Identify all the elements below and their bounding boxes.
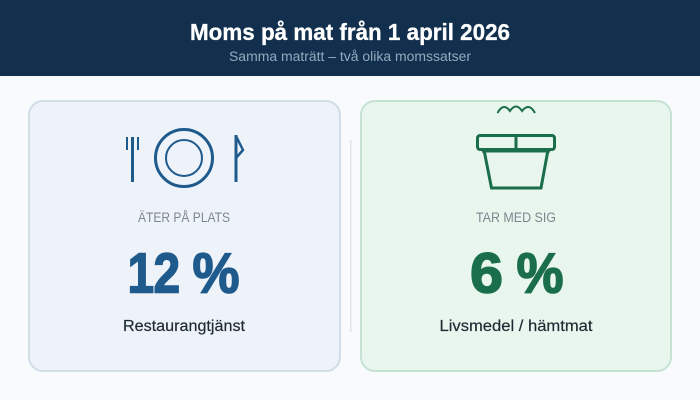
- panel: tar med sig: [361, 101, 671, 371]
- icon: knife: [234, 135, 238, 182]
- rate: 6 %: 6: [470, 242, 503, 306]
- icon: lid: [478, 136, 554, 150]
- header: [0, 0, 700, 76]
- rate: 6 %: %: [516, 242, 564, 306]
- icon: steam: [498, 106, 535, 113]
- label: ÄTER PÅ PLATS: [138, 210, 230, 225]
- icon: fork, plate and knife: [127, 130, 243, 186]
- subtitle: Samma maträtt – två olika momssatser: [229, 49, 472, 64]
- panel: äter på plats: [29, 101, 340, 371]
- icon: fork: [127, 137, 138, 150]
- icon: takeaway box: [478, 106, 554, 188]
- rate: 12 %: [128, 242, 240, 306]
- divider: [350, 140, 352, 332]
- rate: 12 %: %: [192, 242, 240, 306]
- label: TAR MED SIG: [476, 210, 556, 225]
- description: Livsmedel / hämtmat: [440, 318, 593, 335]
- description: Restaurangtjänst: [123, 318, 246, 335]
- icon: plate: [156, 130, 212, 186]
- rate: 12 %: 12: [128, 242, 180, 305]
- title: Moms på mat från 1 april 2026: [190, 19, 510, 45]
- rate: 6 %: [470, 242, 564, 306]
- icon: container: [484, 150, 548, 188]
